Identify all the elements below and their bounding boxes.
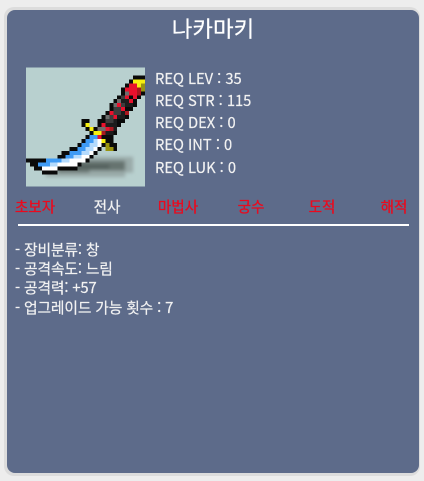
job: beginner: 초보자	[15, 196, 55, 217]
item detail: attack power: - 공격력: +57	[15, 277, 97, 298]
item detail: attack speed: - 공격속도: 느림	[15, 258, 113, 279]
job: thief: 도적	[309, 196, 335, 217]
stat: required luck: REQ LUK : 0	[155, 157, 236, 178]
stat: required intelligence: REQ INT : 0	[155, 134, 232, 155]
title: 나카마키	[172, 12, 254, 44]
icon: item sprite of curved blade	[26, 68, 145, 186]
stat: required level: REQ LEV : 35	[155, 68, 242, 89]
job: pirate: 해적	[381, 196, 407, 217]
stat: required strength: REQ STR : 115	[155, 90, 251, 111]
job: archer: 궁수	[238, 196, 264, 217]
item detail: category: - 장비분류: 창	[15, 239, 99, 260]
stat: required dexterity: REQ DEX : 0	[155, 112, 236, 133]
item detail: upgrades available: - 업그레이드 가능 횟수 : 7	[15, 297, 173, 318]
job: warrior: 전사	[94, 196, 120, 217]
job: magician: 마법사	[158, 196, 198, 217]
divider line	[18, 224, 409, 226]
